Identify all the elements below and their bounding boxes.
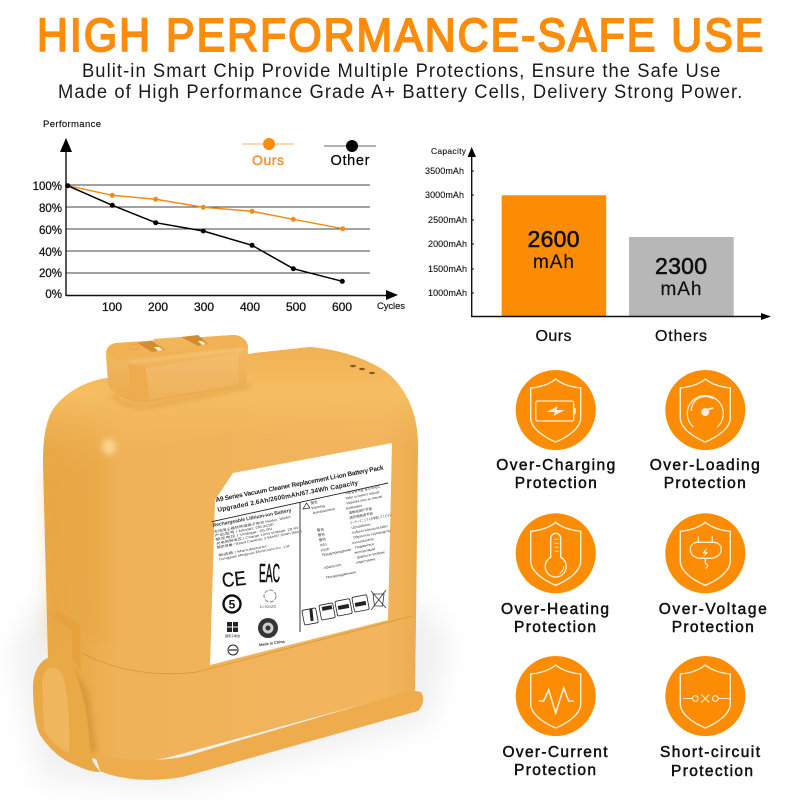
crossed bin pictogram	[371, 590, 386, 610]
chart gridlines	[66, 185, 370, 273]
y axis labels: 3500mAh	[425, 166, 464, 176]
title: HIGH PERFORMANCE-SAFE USE	[37, 11, 763, 61]
icon: short-circuit	[665, 656, 745, 736]
value: ours: 2600	[528, 226, 580, 252]
value: ours	[528, 226, 580, 273]
x arrowhead	[761, 313, 771, 320]
y axis labels	[33, 181, 62, 301]
value: others: mAh	[660, 279, 702, 300]
y arrowhead	[468, 147, 476, 157]
label warning headings: 警告	[318, 536, 327, 543]
label warning text: пользователя	[352, 537, 374, 545]
terminal connector	[106, 335, 248, 402]
label warning text: · Обратитесь к руководству	[351, 529, 391, 540]
battery top highlight	[43, 347, 418, 465]
bar chart: capacity	[425, 146, 771, 345]
caption: over-loading: Protection	[664, 475, 746, 492]
connector slots	[137, 335, 208, 352]
caption: over-loading: Over-Loading	[650, 457, 760, 474]
corner highlight	[102, 439, 116, 455]
battery shadow	[12, 600, 450, 792]
legend: ours	[242, 138, 294, 168]
label warning text: · 사용설명서를 참조하세요	[342, 484, 380, 496]
y axis labels: 40%	[39, 247, 62, 259]
label title: Upgraded 2.6Ah/2600mAh/67.34Wh Capacity	[217, 480, 359, 514]
connector corner	[128, 362, 149, 400]
y axis	[471, 156, 473, 317]
warning triangle icon	[303, 503, 310, 509]
label warning headings: Предупреждение	[321, 548, 352, 557]
label spec text	[212, 507, 304, 561]
label warning text	[342, 483, 400, 565]
value: others	[655, 253, 707, 300]
product label	[210, 443, 400, 665]
caption: over-current: Over-Current	[502, 744, 608, 761]
label warning text: · ユーザーマニュアルを参照してください	[348, 512, 393, 525]
recycling mark: Li-ion20	[260, 604, 277, 609]
label warning headings: 警告	[316, 526, 325, 533]
label sheet	[210, 443, 392, 665]
x arrowhead	[386, 290, 398, 300]
bar: ours	[502, 195, 606, 316]
caption: over-heating	[501, 601, 609, 636]
y axis labels: 2500mAh	[428, 215, 467, 225]
label warning text: · Uživatelskou	[349, 522, 371, 530]
caption: over-loading	[650, 457, 760, 492]
value: others: 2300	[655, 253, 707, 279]
x axis	[471, 316, 762, 318]
recycling mark	[260, 590, 277, 609]
legend: other: Other	[330, 153, 370, 169]
category labels: Ours	[536, 328, 572, 345]
axis title: cycles: Cycles	[377, 301, 405, 312]
vent dots	[350, 365, 375, 374]
product label: EAC	[259, 558, 280, 588]
label warning headings: Попередження	[326, 570, 356, 580]
label divider lines	[212, 483, 388, 632]
label warning text: · 請參閱使用手冊	[347, 511, 374, 521]
bar: others	[629, 237, 734, 316]
y axis ticks	[471, 171, 474, 293]
label warning headings: 警告	[310, 499, 318, 505]
label warning headings	[310, 495, 356, 580]
connector top face	[106, 335, 248, 362]
axis title: performance: Performance	[43, 119, 101, 130]
caption: over-charging: Protection	[515, 475, 597, 492]
5 year mark: 5	[229, 598, 236, 612]
y axis labels: 100%	[33, 181, 62, 193]
x axis arrow	[66, 294, 388, 296]
label warning text: · Подивитеся	[353, 542, 374, 550]
category labels	[536, 328, 707, 345]
label warning text: · Refer to owner's manual	[343, 490, 380, 501]
caption: short-circuit	[660, 744, 761, 780]
y axis labels: 20%	[39, 268, 62, 280]
legend: ours: Ours	[252, 152, 284, 168]
icon: over-current	[516, 656, 596, 736]
battery illustration	[33, 335, 423, 780]
label spec text: 无线吸尘器替换锂离子电池 Model: 18650	[213, 514, 291, 534]
caption: over-heating: Protection	[514, 619, 596, 636]
label spec text: 制造商 / Manufacturer:	[218, 543, 268, 557]
icon: over-loading	[665, 370, 745, 450]
x axis labels: 200	[148, 300, 168, 314]
y axis arrow	[65, 150, 67, 296]
battery body	[43, 347, 418, 763]
label warning headings: Uyari	[320, 547, 330, 552]
series: other	[65, 183, 345, 284]
subtitle: Made of High Performance Grade A+ Battery Cells, Delivery Strong Power.	[58, 82, 742, 103]
caption: over-charging	[496, 457, 615, 492]
subtitle: Bulit-in Smart Chip Provide Multiple Protections, Ensure the Safe Use	[82, 61, 720, 82]
protection icons	[496, 370, 767, 780]
y axis labels: 2000mAh	[428, 239, 467, 249]
icon: over-heating	[516, 513, 596, 593]
label warning text: · Дивіться посібник	[355, 550, 386, 560]
legend: other	[324, 140, 376, 169]
label spec text: 产品型号 / Model: DK3230	[214, 521, 274, 538]
x axis labels: 400	[240, 300, 260, 314]
shadow beside clip	[70, 665, 97, 755]
label warning headings: 警告	[317, 531, 326, 538]
category labels: Others	[655, 328, 707, 345]
caption: over-voltage: Over-Voltage	[659, 601, 767, 618]
label warning text: · 请参阅用户手册	[346, 506, 373, 516]
connector ring mark	[129, 344, 139, 350]
caption: short-circuit: Protection	[671, 763, 753, 780]
small circle mark	[228, 645, 238, 655]
caption: short-circuit: Short-circuit	[660, 744, 761, 761]
label spec text: 额定电压 / Voltage: 25.9V	[215, 525, 274, 542]
label warning text: d'utilisation	[345, 504, 363, 511]
series: ours	[68, 186, 345, 231]
label warning headings: Avertissement	[312, 507, 335, 515]
label spec text: 额定容量 / Rated Capacity: 2.6Ah/67.34Wh (Min.)	[216, 528, 302, 550]
connector front panel	[146, 353, 239, 400]
label warning text: эксплуатации	[354, 547, 376, 555]
y axis labels: 1000mAh	[428, 288, 467, 298]
fan square mark: 锂离子电池	[225, 633, 240, 638]
made in china: Made in China	[259, 640, 286, 647]
body seam	[82, 616, 412, 674]
latch tab	[53, 610, 81, 670]
fan square mark	[225, 622, 240, 638]
caption: over-voltage: Protection	[672, 619, 754, 636]
x axis labels: 600	[332, 300, 352, 314]
y axis labels: 1500mAh	[428, 264, 467, 274]
round certification mark	[258, 618, 278, 638]
icon: over-voltage	[665, 513, 745, 593]
y axis labels: 80%	[39, 203, 62, 215]
caption: over-heating: Over-Heating	[501, 601, 609, 618]
y axis labels: 0%	[45, 289, 62, 301]
left face shade	[46, 455, 112, 640]
value: ours: mAh	[533, 252, 574, 273]
y axis labels: 3000mAh	[425, 190, 464, 200]
warning pictograms	[302, 595, 369, 625]
axis title: capacity: Capacity	[431, 146, 467, 156]
bottom flange	[95, 690, 423, 780]
caption: over-current: Protection	[514, 762, 596, 779]
shadow under connector	[112, 386, 250, 406]
5 year mark	[224, 596, 240, 612]
label spec text: 充电限制电压 / Charge Limit Voltage: 29.4V	[216, 524, 300, 546]
x axis labels: 100	[102, 300, 122, 314]
label warning headings: Warning	[311, 504, 325, 510]
x axis labels: 300	[194, 300, 214, 314]
y axis labels: 60%	[39, 225, 62, 237]
caption: over-current	[502, 744, 608, 779]
icon: over-charging	[516, 370, 596, 450]
label spec text: Dongguan Mingyuan Electronics Co., Ltd.	[219, 544, 290, 561]
x axis labels: 500	[286, 300, 306, 314]
caption: over-charging: Over-Charging	[496, 457, 615, 474]
clip inner recess	[42, 668, 69, 753]
subtitle	[58, 61, 742, 103]
connector raised block	[153, 337, 202, 351]
connector outline	[106, 335, 248, 402]
label warning headings: Inčn	[319, 542, 327, 547]
label warning text: · Reportez-vous au manuel	[344, 495, 383, 506]
side clip	[33, 657, 100, 772]
label warning text: · Kullanıcı kılavuzuna bakın	[350, 524, 388, 535]
caption: over-voltage	[659, 601, 767, 636]
label warning text: користувача	[356, 557, 376, 565]
y axis labels	[425, 166, 467, 298]
CE mark: CE	[221, 568, 247, 592]
line chart: performance vs cycles	[33, 119, 405, 314]
x axis labels	[102, 300, 352, 314]
label warning headings: Αδιάλειπτη	[324, 563, 342, 570]
label title: A9 Series Vacuum Cleaner Replacement Li-ion Battery Pack	[215, 464, 385, 504]
label spec text: Rechargeable Lithium-ion Battery	[212, 508, 292, 529]
y arrowhead	[60, 138, 72, 152]
